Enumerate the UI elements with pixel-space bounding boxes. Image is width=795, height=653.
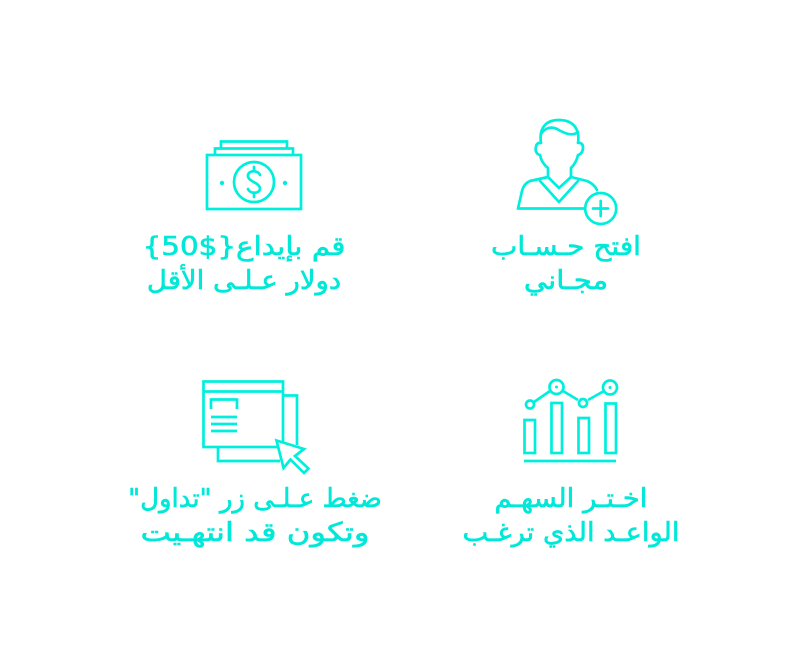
text: deposit 50 dollars: قم بإيداع{50$} — [143, 232, 345, 262]
text: open a free account — [491, 232, 641, 296]
text: deposit 50 dollars: دولار عـلـى الأقل — [147, 266, 341, 296]
text: choose the stock — [463, 484, 679, 548]
text: open a free account: افتح حـسـاب — [491, 232, 641, 262]
text: click the trade button: ضغط عـلـى زر "تداول" — [128, 484, 382, 514]
text: open a free account: مجـاني — [524, 266, 608, 296]
text: choose the stock: الواعـد الذي ترغـب — [463, 518, 679, 548]
text: click the trade button — [128, 484, 382, 548]
text: choose the stock: اخـتـر السهـم — [495, 484, 647, 514]
text: deposit 50 dollars — [143, 232, 345, 296]
text: click the trade button: وتكون قد انتهـيت — [141, 518, 369, 548]
